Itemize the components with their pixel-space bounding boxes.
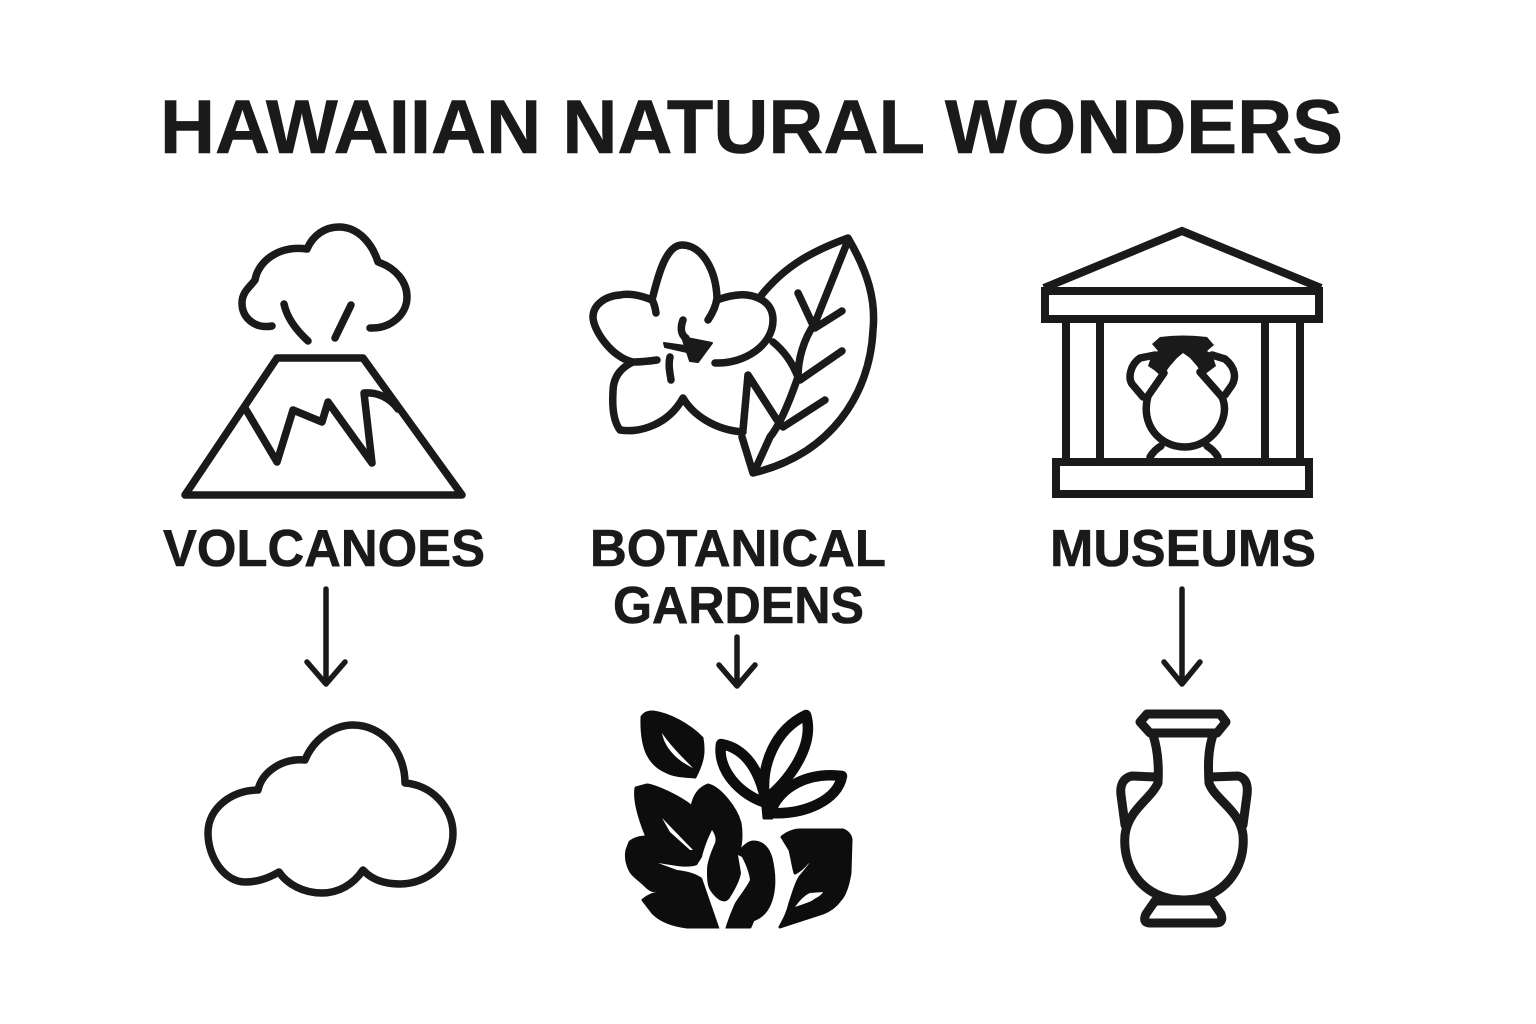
icon part: urn <box>1130 336 1234 457</box>
icon: erupting volcano <box>185 227 462 495</box>
icon part: top-left leaf <box>642 712 703 777</box>
label: volcanoes: VOLCANOES <box>163 520 485 578</box>
icon part: outlined leaves <box>721 715 842 813</box>
icon part: pediment and entablature <box>1044 231 1321 319</box>
icon part: vase foot <box>1145 901 1222 923</box>
label: botanical gardens: GARDENS <box>613 577 864 635</box>
icon part: lower-right leaf <box>780 830 851 927</box>
icon part: columns <box>1066 319 1300 460</box>
icon part: flower petals <box>593 245 773 432</box>
arrow: museums to vase <box>1164 589 1200 684</box>
label: museums: MUSEUMS <box>1050 520 1316 578</box>
icon part: smoke lines <box>284 304 351 341</box>
icon part: large leaf group <box>626 785 774 927</box>
icon part: leaf veins <box>743 243 847 470</box>
icon part: leaf outline <box>742 238 874 473</box>
icon: foliage cluster <box>626 712 851 930</box>
icon part: vase lip <box>1140 714 1226 733</box>
icon: amphora vase <box>1121 714 1247 923</box>
icon: cloud <box>208 725 453 893</box>
label: botanical gardens <box>590 520 886 635</box>
icon part: flower centre <box>669 320 686 380</box>
icon part: vase body <box>1125 735 1243 900</box>
icon: museum building with urn <box>1044 231 1321 494</box>
icon part: vase handles <box>1121 776 1247 825</box>
icon part: base <box>1056 462 1309 494</box>
arrow: volcanoes to cloud <box>307 589 345 684</box>
icon part: mountain <box>185 358 462 495</box>
icon part: lava flow <box>245 393 398 463</box>
label: botanical gardens: BOTANICAL <box>590 520 886 578</box>
icon part: ash cloud <box>242 227 407 328</box>
title: HAWAIIAN NATURAL WONDERS <box>160 85 1343 170</box>
icon: flower and leaf <box>593 238 874 473</box>
arrow: botanical gardens to foliage <box>719 637 755 686</box>
